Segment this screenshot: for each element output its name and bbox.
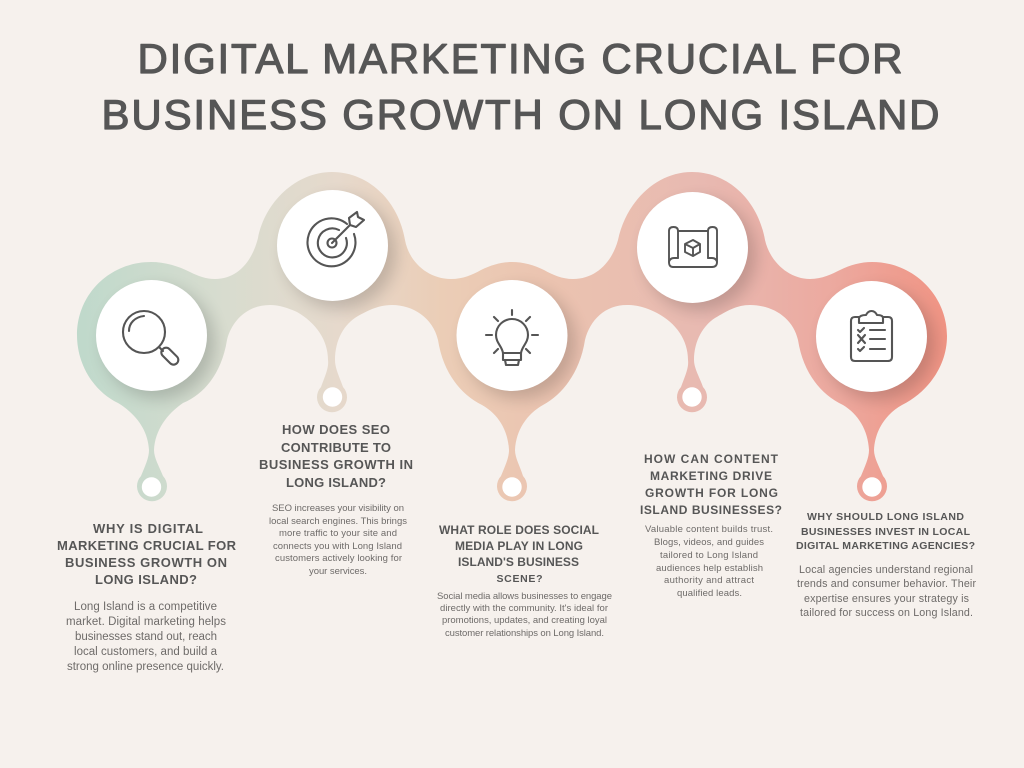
body 4: audiences help establish <box>656 563 763 574</box>
heading 1: LONG ISLAND? <box>95 572 197 587</box>
body 1 <box>66 601 226 673</box>
body 2: local search engines. This brings <box>269 516 407 527</box>
body 4 <box>645 524 773 599</box>
heading 5: DIGITAL MARKETING AGENCIES? <box>796 540 975 552</box>
body 3: customer relationships on Long Island. <box>445 628 604 639</box>
heading 1: BUSINESS GROWTH ON <box>65 555 227 570</box>
text block 1 <box>57 521 237 673</box>
body 1: local customers, and build a <box>74 646 218 658</box>
text block 3 <box>437 523 612 639</box>
body 4: Valuable content builds trust. <box>645 524 773 535</box>
node 5: checklist <box>816 281 927 497</box>
timeline ribbon <box>77 172 947 501</box>
text block 4 <box>640 452 782 599</box>
body 5: expertise ensures your strategy is <box>804 593 969 605</box>
body 3: directly with the community. It's ideal for <box>440 603 608 614</box>
body 1: market. Digital marketing helps <box>66 616 226 628</box>
body 2: customers actively looking for <box>275 553 402 564</box>
heading 3: ISLAND'S BUSINESS <box>458 555 579 569</box>
heading 4: ISLAND BUSINESSES? <box>640 503 782 517</box>
body 5: Local agencies understand regional <box>799 564 973 576</box>
body 2: SEO increases your visibility on <box>272 503 404 514</box>
heading 3 <box>439 523 599 585</box>
title: BUSINESS GROWTH ON LONG ISLAND <box>102 91 940 138</box>
body 2 <box>269 503 407 577</box>
icon: magnifying glass <box>123 311 180 367</box>
node 3: light bulb <box>456 280 568 497</box>
node 4: blueprint <box>637 192 748 407</box>
heading 5 <box>796 511 975 552</box>
body 5: tailored for success on Long Island. <box>800 607 973 619</box>
node 2: target <box>277 190 388 407</box>
icon: target with arrow <box>307 212 364 266</box>
heading 2: LONG ISLAND? <box>286 475 386 490</box>
body 3 <box>437 591 612 639</box>
icon: blueprint with cube <box>669 227 717 267</box>
heading 1: MARKETING CRUCIAL FOR <box>57 538 237 553</box>
heading 1 <box>57 521 237 587</box>
icon: light bulb <box>486 310 538 365</box>
icon: clipboard checklist <box>851 311 892 361</box>
heading 2 <box>259 422 413 490</box>
body 2: more traffic to your site and <box>279 528 397 539</box>
body 2: your services. <box>309 566 367 577</box>
heading 3: WHAT ROLE DOES SOCIAL <box>439 523 599 537</box>
body 2: connects you with Long Island <box>273 541 402 552</box>
heading 3: MEDIA PLAY IN LONG <box>455 539 583 553</box>
heading 4: HOW CAN CONTENT <box>644 452 779 466</box>
title: DIGITAL MARKETING CRUCIAL FOR <box>138 35 902 82</box>
body 4: Blogs, videos, and guides <box>654 537 764 548</box>
body 5 <box>797 564 976 619</box>
heading 4 <box>640 452 782 517</box>
heading 1: WHY IS DIGITAL <box>93 521 203 536</box>
body 1: businesses stand out, reach <box>75 631 217 643</box>
body 4: authority and attract <box>664 575 754 586</box>
text block 2 <box>259 422 413 577</box>
heading 5: WHY SHOULD LONG ISLAND <box>807 511 964 523</box>
body 5: trends and consumer behavior. Their <box>797 578 976 590</box>
text block 5 <box>796 511 976 619</box>
body 4: qualified leads. <box>677 588 742 599</box>
title <box>102 35 940 138</box>
body 1: strong online presence quickly. <box>67 661 224 673</box>
heading 3: SCENE? <box>496 573 542 585</box>
heading 2: HOW DOES SEO <box>282 422 390 437</box>
heading 2: BUSINESS GROWTH IN <box>259 457 413 472</box>
heading 5: BUSINESSES INVEST IN LOCAL <box>801 526 971 538</box>
heading 2: CONTRIBUTE TO <box>281 440 391 455</box>
heading 4: GROWTH FOR LONG <box>645 486 778 500</box>
body 3: Social media allows businesses to engage <box>437 591 612 602</box>
body 3: promotions, updates, and creating loyal <box>442 615 607 626</box>
body 4: tailored to Long Island <box>660 550 758 561</box>
heading 4: MARKETING DRIVE <box>650 469 772 483</box>
body 1: Long Island is a competitive <box>74 601 217 613</box>
node 1: search <box>96 280 207 497</box>
